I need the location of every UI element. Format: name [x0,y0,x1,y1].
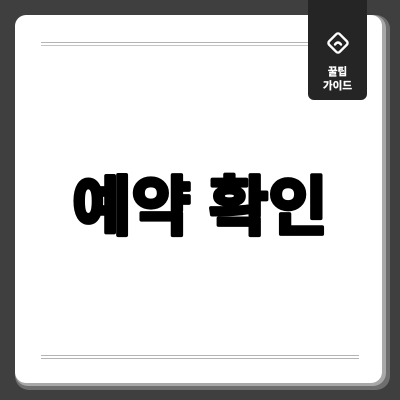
badge [308,0,367,100]
bottom double rule [41,355,359,359]
badge label [323,64,352,93]
top double rule [41,42,308,46]
icon: rounded diamond with chevron [327,32,349,54]
badge label: 꿀팁 [328,64,347,79]
badge label: 가이드 [323,78,352,93]
